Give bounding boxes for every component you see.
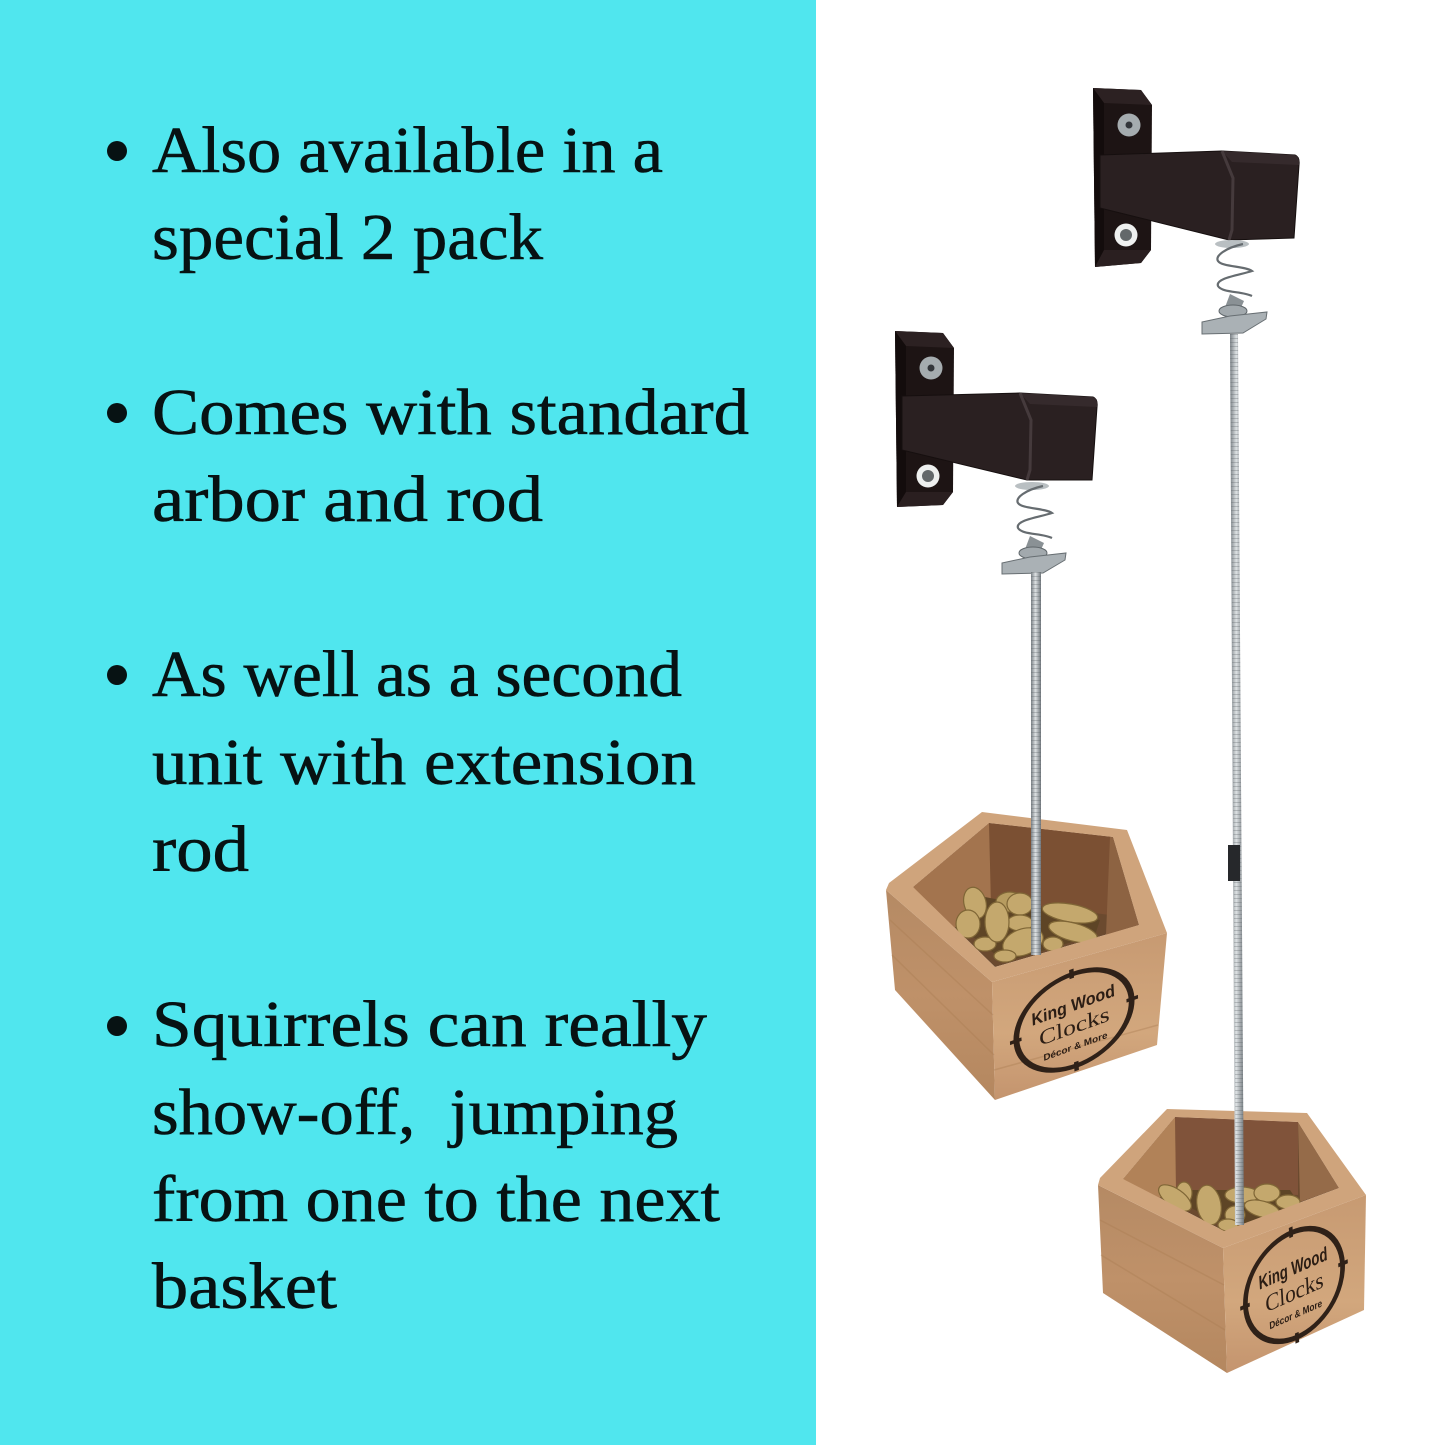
bullet 3: extension rod: rod: [152, 813, 249, 886]
panel: turquoise text background: [0, 0, 816, 1445]
bullet 3: extension rod: As well as a second: [152, 638, 682, 711]
bullet 2: standard arbor: [107, 376, 749, 536]
bullet 1: 2 pack: special 2 pack: [152, 201, 543, 274]
bullet 2: standard arbor: arbor and rod: [152, 463, 543, 536]
basket inner walls: [913, 823, 1139, 967]
burned logo: King Wood: [1258, 1243, 1328, 1295]
burned logo: Décor & More: [1269, 1298, 1323, 1333]
bullet 4: squirrels: basket: [152, 1250, 337, 1323]
bullet 4: squirrels: show-off, jumping: [152, 1076, 678, 1149]
bullet 1: 2 pack: Also available in a: [152, 114, 663, 187]
product: short feeder unit: [886, 331, 1167, 1100]
peanut basket with logo: [1098, 1109, 1366, 1373]
burned logo: Décor & More: [1043, 1030, 1108, 1064]
peanuts: [1154, 1180, 1300, 1231]
bullet list: [107, 114, 749, 1323]
burned logo: [1237, 1203, 1351, 1367]
bullet 3: extension rod: [107, 638, 696, 886]
burned logo: Clocks: [1039, 1003, 1110, 1051]
burned logo: King Wood: [1031, 981, 1115, 1030]
bullet 3: extension rod: unit with extension: [152, 726, 696, 799]
bullet 4: squirrels: from one to the next: [152, 1163, 720, 1236]
threaded rod: [1031, 572, 1041, 955]
burned logo: Clocks: [1265, 1267, 1324, 1319]
spring and T-nut: [1202, 240, 1267, 334]
peanut basket with logo: [886, 812, 1167, 1100]
peanuts: [956, 885, 1100, 962]
basket outer faces: [886, 890, 1167, 1100]
bullet 4: squirrels: [107, 988, 720, 1323]
bullet 2: standard arbor: Comes with standard: [152, 376, 749, 449]
wall bracket: [1093, 88, 1299, 267]
spring and T-nut: [1002, 482, 1066, 574]
wall bracket: [895, 331, 1097, 507]
bullet 4: squirrels: Squirrels can really: [152, 988, 707, 1061]
basket outer faces: [1098, 1185, 1366, 1373]
burned logo: [1007, 946, 1141, 1094]
basket rim: [886, 812, 1167, 982]
bullet 1: 2 pack: [107, 114, 663, 274]
product: tall feeder unit with extension rod: [1093, 88, 1366, 1373]
basket inner walls: [1123, 1117, 1339, 1231]
basket rim: [1098, 1109, 1366, 1248]
threaded rod with coupling: [1228, 334, 1244, 1225]
